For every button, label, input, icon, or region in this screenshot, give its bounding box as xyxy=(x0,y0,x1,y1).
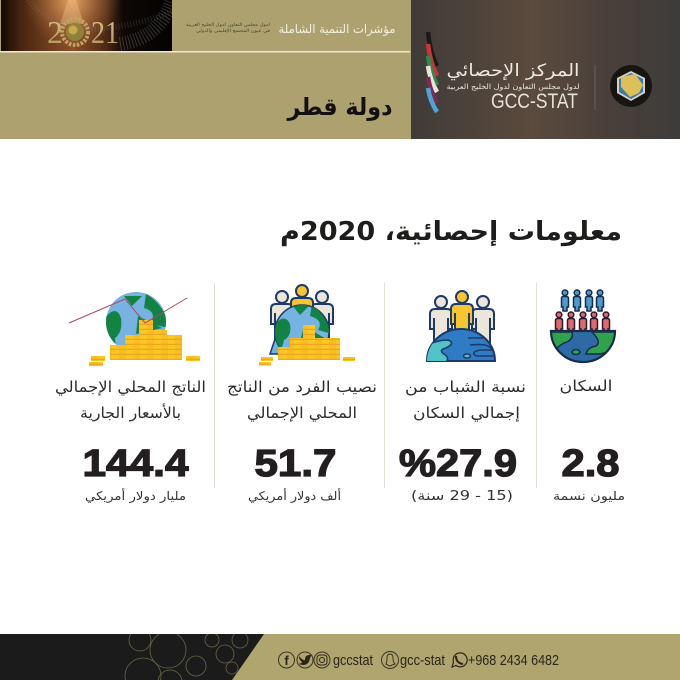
icon: youth on globe xyxy=(426,291,496,362)
icon: GCC emblem xyxy=(610,65,652,107)
text: phone number: +968 2434 6482 xyxy=(468,652,559,669)
icon: whatsapp xyxy=(452,653,467,667)
panel: 2021 banner image: 21 xyxy=(91,14,119,50)
unit: billion USD: مليار دولار أمريكي xyxy=(85,488,186,504)
panel: header khaki band xyxy=(0,0,411,139)
icon: globe and coins with trend line xyxy=(69,292,200,366)
column dividers xyxy=(214,283,537,488)
label: population: السكان xyxy=(560,377,612,395)
icon: people on bowl xyxy=(548,290,616,362)
panel: 2021 banner image: 2 xyxy=(47,14,63,50)
heading: country name: دولة قطر xyxy=(287,93,392,121)
label: youth share xyxy=(405,378,526,423)
icon: flag ribbon xyxy=(428,32,437,112)
value: 2.8: 2.8 xyxy=(562,443,620,485)
label: GDP at current prices xyxy=(55,378,206,422)
value: 144.4: 144.4 xyxy=(82,443,188,485)
text: centre subtitle: لدول مجلس التعاون لدول الخليج العربية xyxy=(446,83,580,91)
label: GDP at current prices: بالأسعار الجارية xyxy=(80,403,181,422)
text: gcc-stat: gcc-stat xyxy=(400,652,446,669)
unit: thousand USD: ألف دولار أمريكي xyxy=(248,488,341,504)
text: GCC-STAT: GCC-STAT xyxy=(491,90,578,113)
icon: twitter xyxy=(298,655,312,665)
icon: facebook: f xyxy=(284,653,289,668)
label: youth share: نسبة الشباب من xyxy=(405,378,526,396)
panel: youth share xyxy=(399,291,526,504)
heading: statistical information 2020: معلومات إحصائية، 2020م xyxy=(280,217,622,247)
label: GDP per capita: نصيب الفرد من الناتج xyxy=(227,378,377,396)
panel: 2021 banner image xyxy=(1,0,172,51)
text: gccstat: gccstat xyxy=(333,652,374,669)
icon: social links xyxy=(278,652,330,668)
panel: population xyxy=(548,290,625,504)
trend line xyxy=(69,298,187,323)
panel: GDP at current prices xyxy=(55,292,206,504)
unit: age range: (15 - 29 سنة) xyxy=(411,489,513,504)
value: 51.7: 51.7 xyxy=(254,443,336,485)
unit: million: مليون نسمة xyxy=(553,489,625,504)
icon: snapchat xyxy=(382,652,398,668)
label: youth share: إجمالي السكان xyxy=(413,404,520,423)
label: GDP at current prices: الناتج المحلي الإجمالي xyxy=(55,378,206,397)
panel: GDP per capita xyxy=(227,285,377,504)
label: GDP per capita: المحلي الإجمالي xyxy=(247,404,357,423)
text: small report caption xyxy=(186,23,270,34)
text: small report caption: في عيون المجتمع الإقليمي والدولي xyxy=(196,29,270,34)
panel: footer xyxy=(0,629,680,680)
panel: GCC-STAT logo band xyxy=(411,0,680,139)
label: GDP per capita xyxy=(227,378,377,423)
text: small report caption: لدول مجلس التعاون لدول الخليج العربية xyxy=(186,23,270,28)
text: indicators heading: مؤشرات التنمية الشاملة xyxy=(278,22,396,37)
icon: people globe and coins xyxy=(259,285,355,366)
text: centre name: المركز الإحصائي xyxy=(446,61,580,81)
value: 27.9%: %27.9 xyxy=(399,443,517,485)
icon: instagram xyxy=(317,655,327,665)
